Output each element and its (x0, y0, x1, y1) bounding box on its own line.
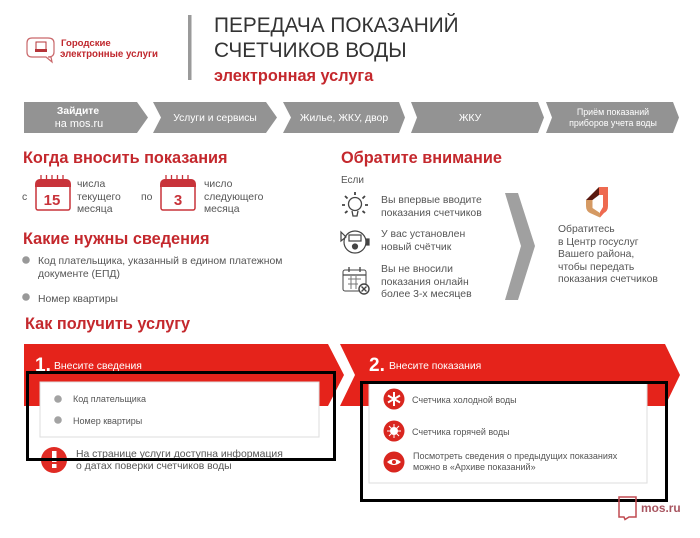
icon: calendar 3: 3 (174, 192, 182, 209)
step: housing: Жилье, ЖКУ, двор (300, 113, 388, 124)
text: contact public services centre: чтобы передать (558, 261, 634, 273)
text: contact public services centre: показания счетчиков (558, 274, 658, 285)
card: step 2 readings (369, 382, 647, 483)
list: required information: Код плательщика, указанный в едином платежном (38, 256, 282, 267)
panel: step 1 enter details (24, 344, 344, 473)
card: step 2 readings: Счетчика холодной воды (412, 395, 517, 405)
title (214, 13, 459, 85)
card: step 1 fields: Код плательщика (73, 394, 146, 404)
heading: when to submit: Когда вносить показания (23, 149, 228, 167)
icon: cold water (384, 388, 404, 410)
heading: how to get the service: Как получить услугу (25, 315, 190, 333)
arrow: large grey chevron (505, 193, 535, 300)
text: new meter installed: У вас установлен (381, 229, 465, 240)
card: step 2 readings: можно в «Архиве показаний» (413, 462, 536, 472)
logo: mos.ru: mos.ru (641, 501, 681, 515)
step: services: Услуги и сервисы (173, 113, 257, 124)
icon: exclamation mark (41, 447, 67, 473)
text: of the next month: следующего (204, 192, 264, 203)
icon: calendar with cross (343, 267, 369, 294)
step: go to mos.ru (24, 102, 148, 133)
text: of the next month: месяца (204, 204, 240, 215)
icon: light bulb (342, 192, 368, 216)
icon: public services shield (586, 187, 608, 218)
title: электронная услуга (214, 67, 374, 85)
step number 2: 2. (369, 355, 385, 376)
header divider (188, 15, 192, 80)
card: step 2 readings: Посмотреть сведения о предыдущих показаниях (413, 451, 617, 461)
step: utilities (411, 102, 544, 133)
step number 1: 1. (35, 355, 51, 376)
card: step 1 fields: Номер квартиры (73, 416, 142, 426)
list: required information (22, 256, 282, 305)
step title 2: Внесите показания (389, 361, 481, 372)
icon: calendar 15 (35, 175, 71, 210)
step: meter readings: Приём показаний (577, 107, 649, 117)
note: verification dates: На странице услуги доступна информация (76, 449, 283, 460)
banner: step 1 (24, 344, 344, 406)
title: СЧЕТЧИКОВ ВОДЫ (214, 39, 407, 62)
text: of the current month: числа (77, 179, 105, 190)
icon: eye (384, 452, 404, 472)
logo: city electronic services (27, 38, 158, 62)
text: of the next month: число (204, 179, 232, 190)
text: contact public services centre: Вашего района, (558, 249, 634, 260)
text: not submitted for three months: показания онлайн (381, 277, 469, 288)
label: if: Если (341, 175, 364, 186)
step: meter readings (546, 102, 679, 133)
step title 1: Внесите сведения (54, 361, 142, 372)
list: required information: документе (ЕПД) (38, 269, 120, 280)
step: services (153, 102, 277, 133)
text: not submitted for three months: Вы не вносили (381, 264, 453, 275)
card: step 2 readings: Счетчика горячей воды (412, 427, 510, 437)
annotation: black frame 2 (362, 382, 666, 500)
icon: calendar 3 (160, 175, 196, 210)
text: new meter installed: новый счётчик (381, 242, 452, 253)
step: go to mos.ru: Зайдите (57, 106, 99, 117)
text: contact public services centre: Обратитесь (558, 224, 615, 235)
logo: mos.ru (619, 497, 681, 520)
label: from: с (22, 192, 27, 203)
navigation steps (24, 102, 679, 133)
logo: city electronic services: электронные услуги (60, 49, 158, 60)
heading: pay attention: Обратите внимание (341, 149, 502, 167)
logo: city electronic services: Городские (61, 38, 111, 49)
icon: water meter (341, 231, 369, 253)
panel: step 2 enter readings (340, 344, 680, 483)
icon: calendar 15: 15 (44, 192, 60, 209)
card: step 1 fields (40, 382, 319, 437)
list: required information: Номер квартиры (38, 294, 118, 305)
text: of the current month: месяца (77, 204, 113, 215)
icon: hot water (384, 420, 404, 442)
heading: what information is needed: Какие нужны сведения (23, 230, 209, 248)
text: first time entering: показания счетчиков (381, 208, 482, 219)
text: contact public services centre: в Центр госуслуг (558, 237, 639, 248)
text: of the current month: текущего (77, 192, 121, 203)
step: meter readings: приборов учета воды (569, 118, 657, 128)
annotation: black frame 1 (28, 372, 334, 460)
text: first time entering: Вы впервые вводите (381, 195, 482, 206)
title: ПЕРЕДАЧА ПОКАЗАНИЙ (214, 13, 459, 37)
label: to: по (141, 192, 153, 203)
step: go to mos.ru: на mos.ru (55, 118, 103, 130)
step: housing (283, 102, 405, 133)
banner: step 2 (340, 344, 680, 406)
step: utilities: ЖКУ (459, 113, 482, 124)
note: verification dates: о датах поверки счетчиков воды (76, 461, 232, 472)
text: not submitted for three months: более 3-х месяцев (381, 288, 472, 300)
